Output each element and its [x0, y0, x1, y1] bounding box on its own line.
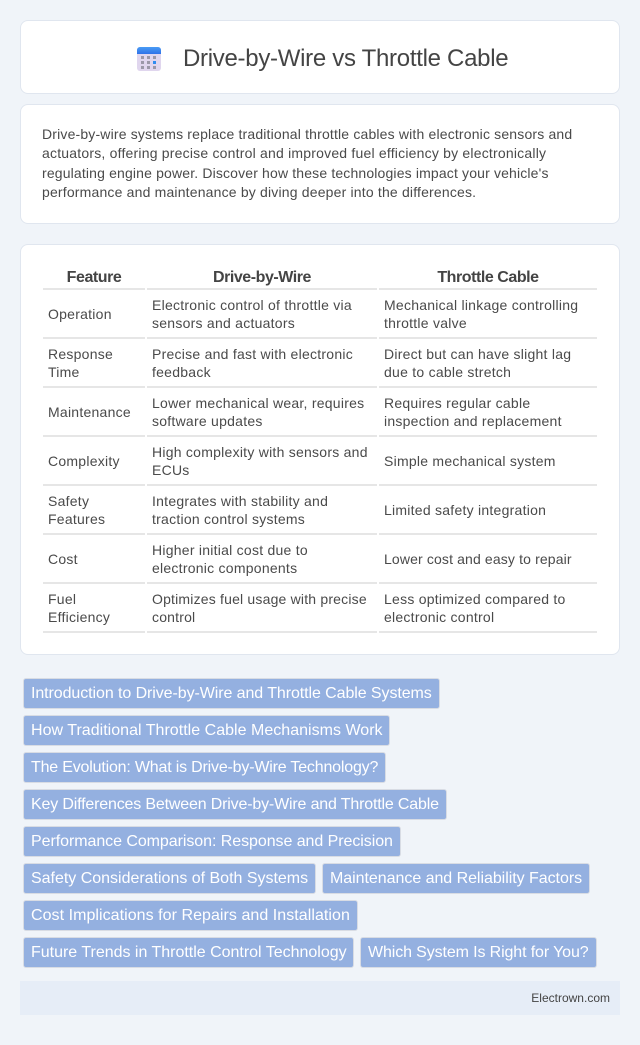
text: Throttle Cable [437, 269, 539, 286]
icon: calendar grid [137, 47, 161, 71]
text: ECUs [152, 462, 190, 478]
text: Mechanical linkage controlling [384, 297, 578, 313]
text: Limited safety integration [384, 502, 546, 518]
text: Higher initial cost due to [152, 542, 308, 558]
text: How Traditional Throttle Cable Mechanisms Work [31, 722, 383, 739]
intro text: regulating engine power. Discover how these technologies impact your vehicle's [42, 165, 549, 181]
text: Complexity [48, 453, 120, 469]
text: Requires regular cable [384, 395, 530, 411]
text: inspection and replacement [384, 413, 562, 429]
text: Feature [67, 269, 121, 286]
intro text: performance and maintenance by diving deeper into the differences. [42, 184, 476, 200]
text: Electronic control of throttle via [152, 297, 352, 313]
text: Direct but can have slight lag [384, 346, 571, 362]
text: sensors and actuators [152, 315, 295, 331]
text: control [152, 609, 195, 625]
text: Which System Is Right for You? [368, 944, 589, 961]
header panel [20, 20, 620, 94]
text: Performance Comparison: Response and Precision [31, 833, 393, 850]
topic tags [23, 678, 597, 968]
footer [20, 981, 620, 1015]
intro text: Drive-by-wire systems replace traditional throttle cables with electronic sensors and [42, 126, 572, 142]
text: Time [48, 364, 80, 380]
table rows [43, 288, 597, 633]
text: software updates [152, 413, 263, 429]
text: Drive-by-Wire [213, 269, 311, 286]
table header [67, 269, 539, 286]
text: Fuel [48, 591, 76, 607]
text: Response [48, 346, 113, 362]
text: Safety [48, 493, 89, 509]
text: Integrates with stability and [152, 493, 328, 509]
text: due to cable stretch [384, 364, 511, 380]
text: Safety Considerations of Both Systems [31, 870, 308, 887]
intro text: actuators, offering precise control and improved fuel efficiency by electronically [42, 145, 546, 161]
text: Lower cost and easy to repair [384, 551, 572, 567]
text: throttle valve [384, 315, 467, 331]
text: Future Trends in Throttle Control Technology [31, 944, 347, 961]
text: Lower mechanical wear, requires [152, 395, 364, 411]
text: electronic components [152, 560, 297, 576]
text: Efficiency [48, 609, 110, 625]
text: Precise and fast with electronic [152, 346, 353, 362]
title: Drive-by-Wire vs Throttle Cable [183, 45, 508, 72]
text: traction control systems [152, 511, 305, 527]
text: Features [48, 511, 105, 527]
text: electronic control [384, 609, 494, 625]
intro text [42, 126, 572, 200]
text: The Evolution: What is Drive-by-Wire Technology? [31, 759, 378, 776]
text: Less optimized compared to [384, 591, 566, 607]
footer source text: Electrown.com [531, 991, 610, 1005]
text: Operation [48, 306, 112, 322]
text: feedback [152, 364, 211, 380]
intro panel [20, 104, 620, 224]
text: Optimizes fuel usage with precise [152, 591, 367, 607]
comparison table panel [20, 244, 620, 655]
text: Key Differences Between Drive-by-Wire and Throttle Cable [31, 796, 439, 813]
text: Cost Implications for Repairs and Installation [31, 907, 350, 924]
text: Maintenance [48, 404, 131, 420]
text: Simple mechanical system [384, 453, 556, 469]
text: High complexity with sensors and [152, 444, 368, 460]
text: Introduction to Drive-by-Wire and Throttle Cable Systems [31, 685, 432, 702]
text: Cost [48, 551, 78, 567]
text: Maintenance and Reliability Factors [330, 870, 582, 887]
